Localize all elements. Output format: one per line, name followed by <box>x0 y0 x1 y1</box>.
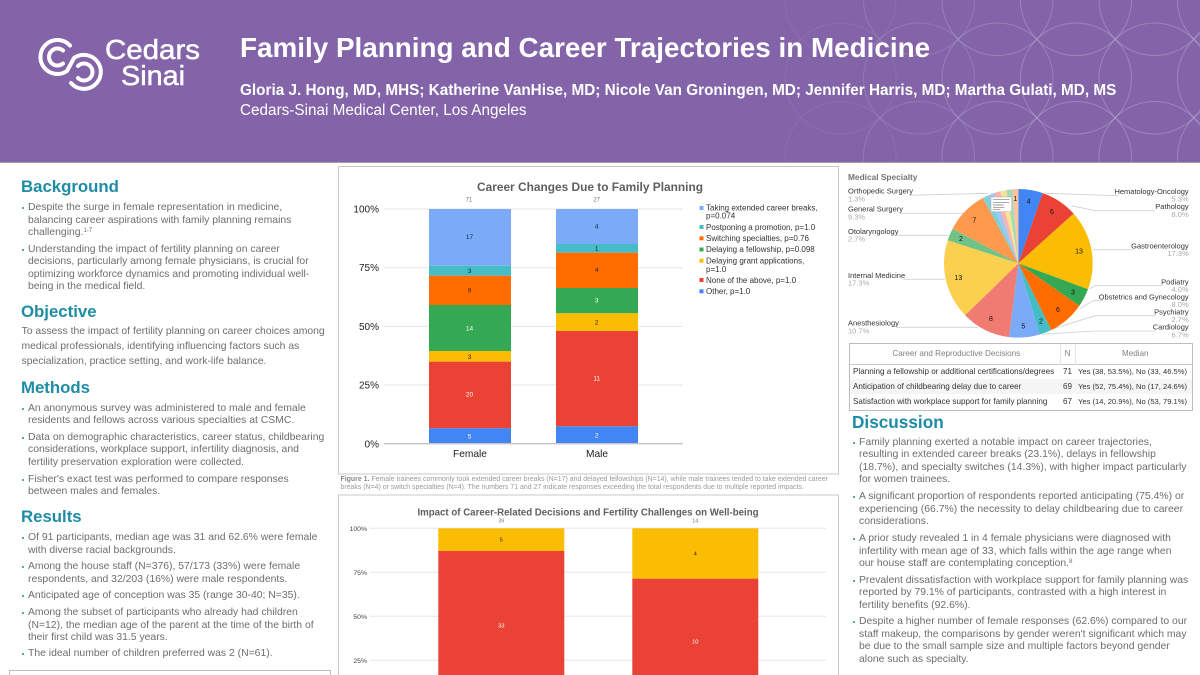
bar: female: 9 <box>468 288 472 295</box>
authors: Gloria J. Hong, MD, MHS; Katherine VanHise, MD; Nicole Van Groningen, MD; Jennifer Harris, MD; Martha Gulati, MD, MS <box>240 82 1116 99</box>
table header row <box>850 349 1192 406</box>
discussion bullet 1: for women trainees. <box>859 474 950 485</box>
discussion bullet 3: our house staff are contemplating conception.8 <box>859 558 1072 569</box>
background bullet 1: Despite the surge in female representation in medicine, <box>28 202 282 213</box>
right pie labels <box>1099 187 1189 340</box>
left pie labels: General Surgery <box>848 205 903 214</box>
right pie labels: Hematology-Oncology <box>1114 187 1189 196</box>
background bullet 2: being in the medical field. <box>28 281 145 292</box>
right pie labels: 2.7% <box>1172 315 1189 324</box>
y axis labels: 0% <box>365 439 379 450</box>
chart legend: Postponing a promotion, p=1.0 <box>706 223 816 232</box>
y axis labels: 100% <box>350 526 367 533</box>
right pie labels: 8.0% <box>1172 300 1189 309</box>
table header row: N <box>1065 349 1070 358</box>
heading: Background: Background <box>21 177 119 196</box>
y axis labels: 75% <box>359 263 379 274</box>
bar: female: 3 <box>468 354 472 361</box>
right pie labels: Podiatry <box>1161 277 1189 286</box>
right pie labels: Cardiology <box>1153 323 1189 332</box>
bar: female <box>438 528 564 675</box>
discussion bullet 2 <box>852 491 1184 529</box>
results bullet 1: Of 91 participants, median age was 31 and 62.6% were female <box>28 532 317 543</box>
background bullet 2 <box>22 244 309 294</box>
background bullet 1: challenging.1-7 <box>28 227 92 238</box>
table row: fellowship: 71 <box>1063 367 1072 376</box>
slice counts: 2 <box>959 236 963 243</box>
totals above bars: 27 <box>593 198 601 204</box>
bar: male: 1 <box>595 246 599 252</box>
y axis labels: 25% <box>359 380 379 392</box>
results bullet 3: Anticipated age of conception was 35 (range 30-40; N=35). <box>28 590 300 601</box>
title: Family Planning and Career Trajectories in Medicine <box>240 32 930 63</box>
results bullet 4: (N=12), the median age of the parent at the time of the birth of <box>28 620 314 631</box>
methods bullet 1 <box>22 403 306 428</box>
x axis labels: Male <box>586 449 608 460</box>
methods bullet 3 <box>22 474 289 499</box>
totals above bars <box>498 518 698 524</box>
methods bullet 1: An anonymous survey was administered to male and female <box>28 403 306 414</box>
slice counts: 5 <box>1021 324 1025 331</box>
slice counts <box>954 196 1083 331</box>
bar: male: 10 <box>692 640 699 646</box>
x axis labels: Female <box>453 449 487 460</box>
bar: male: 4 <box>595 224 599 230</box>
bar: female <box>429 209 511 444</box>
tiny pie legend box <box>991 197 1012 212</box>
totals above bars: 71 <box>466 198 473 204</box>
right pie labels: 5.3% <box>1172 195 1189 204</box>
table header row: Median <box>1122 349 1149 358</box>
logo: Cedars-Sinai: Cedars <box>105 34 200 65</box>
discussion bullet 4: fertility benefits (92.6%). <box>859 600 970 611</box>
heading: Objective: Objective <box>21 302 97 321</box>
discussion bullet 3 <box>852 533 1171 571</box>
slice counts: 6 <box>1050 209 1054 216</box>
panel: medical specialty pie chart <box>848 172 1189 340</box>
left pie labels: 9.3% <box>848 212 865 221</box>
bar: male: 4 <box>694 552 698 558</box>
slice counts: 6 <box>1056 307 1060 314</box>
left pie labels: 1.3% <box>848 195 865 204</box>
chart legend: Taking extended career breaks, <box>706 204 818 213</box>
affiliation: Cedars-Sinai Medical Center, Los Angeles <box>240 102 527 119</box>
results bullet 4 <box>22 607 314 645</box>
logo: Cedars-Sinai <box>38 34 200 91</box>
table row: workplace support <box>853 397 1187 406</box>
results bullet 2: Among the house staff (N=376), 57/173 (33%) were female <box>28 561 300 572</box>
background bullet 2: decisions, particularly among female physicians, is crucial for <box>28 256 309 267</box>
methods bullet 3: Fisher's exact test was performed to compare responses <box>28 474 289 485</box>
results bullet 1: with diverse racial backgrounds. <box>28 545 176 556</box>
background bullet 1: balancing career aspirations with family planning remains <box>28 215 291 226</box>
background bullet 2: Understanding the impact of fertility planning on career <box>28 244 280 255</box>
discussion bullet 3: A prior study revealed 1 in 4 female physicians were diagnosed with <box>859 533 1171 544</box>
table row: fellowship: Planning a fellowship or additional certifications/degrees <box>853 367 1054 376</box>
figure 1 caption: Figure 1. Female trainees commonly took extended career breaks (N=17) and delayed fellowships (N=14), while male trainees tended to take extended career <box>340 476 828 483</box>
slice counts: 1 <box>1013 196 1017 203</box>
results bullet 2: respondents, and 32/203 (16%) were male respondents. <box>28 574 287 585</box>
left pie labels: 10.7% <box>848 326 870 335</box>
totals above bars: 14 <box>692 518 698 524</box>
results bullet 1 <box>22 532 317 557</box>
right pie labels: Psychiatry <box>1154 307 1189 316</box>
chart legend: p=1.0 <box>706 265 727 274</box>
chart legend: Switching specialties, p=0.76 <box>706 234 810 243</box>
y axis labels: 100% <box>353 204 379 216</box>
bar: female: 5 <box>468 434 472 440</box>
table row: childbearing delay: Anticipation of childbearing delay due to career <box>853 382 1021 390</box>
bar: female: 14 <box>466 326 473 332</box>
table header row: Career and Reproductive Decisions <box>892 349 1020 358</box>
pie slices <box>981 226 1056 300</box>
figure 1 caption: breaks (N=4) or switch specialties (N=4). The numbers 71 and 27 indicate responses exceeding the total respondents due to multiple reported impacts. <box>340 484 804 491</box>
slice counts: 13 <box>954 275 962 282</box>
discussion bullet 2: A significant proportion of respondents reported anticipating (75.4%) or <box>859 491 1184 502</box>
right pie labels: Gastroenterology <box>1131 241 1189 250</box>
table row: workplace support: 67 <box>1063 397 1072 406</box>
objective text: To assess the impact of fertility planning on career choices among <box>22 326 325 336</box>
table row: fellowship: Yes (38, 53.5%), No (33, 46.5%) <box>1078 367 1187 376</box>
slice counts: 7 <box>972 217 976 224</box>
methods bullet 2 <box>22 432 324 469</box>
right pie labels: Pathology <box>1155 202 1189 211</box>
table row: childbearing delay <box>850 379 1192 394</box>
methods bullet 3: between males and females. <box>28 486 160 497</box>
chart title: Career Changes Due to Family Planning <box>477 180 703 194</box>
bar: male: 3 <box>595 298 599 304</box>
y axis labels: 75% <box>353 570 367 577</box>
discussion bullet 5: staff makeup, the comparisons by gender weren't significant which may <box>859 629 1187 640</box>
bar: female: 20 <box>466 392 473 398</box>
y axis labels: 50% <box>359 322 379 333</box>
bar: male: 4 <box>595 267 599 274</box>
bar: female: 5 <box>500 538 503 544</box>
table row: childbearing delay: Yes (52, 75.4%), No (17, 24.6%) <box>1078 382 1187 390</box>
slice counts: 2 <box>1039 318 1043 325</box>
discussion bullet 5: Despite a higher number of female responses (62.6%) compared to our <box>859 616 1187 627</box>
header banner <box>0 0 1200 163</box>
discussion bullet 5: alone such as specialty. <box>859 654 969 665</box>
chart legend: p=0.074 <box>706 212 736 220</box>
bar: male <box>632 528 758 675</box>
discussion bullet 2: experiencing (66.7%) the necessity to delay childbearing due to career <box>859 504 1183 515</box>
left pie labels: 17.3% <box>848 279 870 288</box>
bar: female: 3 <box>468 268 472 275</box>
left pie labels: 2.7% <box>848 235 865 244</box>
table row: childbearing delay: 69 <box>1063 382 1072 390</box>
y axis labels: 50% <box>353 614 367 621</box>
methods bullet 2: Data on demographic characteristics, career status, childbearing <box>28 432 324 443</box>
bottom-left cut-off panel <box>9 670 331 675</box>
header circle pattern <box>784 0 1200 162</box>
bar: male: 2 <box>595 320 599 326</box>
discussion bullet 3: infertility with mean age of 33, which falls within the age range when <box>859 546 1171 557</box>
totals above bars <box>466 198 601 204</box>
bar: female: 17 <box>466 234 473 241</box>
results bullet 4: Among the subset of participants who already had children <box>28 607 298 618</box>
bar: male: 2 <box>595 432 599 440</box>
methods bullet 1: residents and fellows across various specialties at CSMC. <box>28 415 294 426</box>
pie title: Medical Specialty <box>848 172 918 182</box>
table row: workplace support: Yes (14, 20.9%), No (53, 79.1%) <box>1078 397 1187 406</box>
methods bullet 2: fertility preservation exploration were collected. <box>28 457 244 468</box>
heading: Discussion: Discussion <box>852 412 944 432</box>
discussion bullet 2: considerations. <box>859 516 929 527</box>
heading: Results: Results <box>21 507 82 526</box>
chart title: Impact of Career-Related Decisions and Fertility Challenges on Well-being <box>417 507 759 518</box>
y axis labels <box>350 526 367 665</box>
table row: workplace support: Satisfaction with workplace support for family planning <box>853 397 1047 406</box>
heading: Methods: Methods <box>21 378 90 397</box>
y axis labels: 25% <box>353 658 367 665</box>
slice counts: 13 <box>1075 249 1083 256</box>
totals above bars: 39 <box>498 518 504 524</box>
left pie labels: Anesthesiology <box>848 319 899 328</box>
discussion bullet 1: resulting in extended career breaks (23.1%), delays in fellowship <box>859 449 1156 460</box>
discussion bullet 4: reported by 79.1% of participants, contrasted with a high interest in <box>859 587 1166 598</box>
objective text: medical professionals, identifying influencing factors such as <box>22 341 299 352</box>
left pie labels: Internal Medicine <box>848 271 905 280</box>
right pie labels: 8.0% <box>1172 210 1189 219</box>
leader lines <box>897 193 1162 334</box>
slice counts: 3 <box>1071 289 1075 296</box>
discussion bullet 4: Prevalent dissatisfaction with workplace support for family planning was <box>859 575 1188 586</box>
left pie labels: Otolaryngology <box>848 227 899 236</box>
chart legend: None of the above, p=1.0 <box>706 276 797 285</box>
left pie labels: Orthopedic Surgery <box>848 187 913 196</box>
chart legend: Delaying a fellowship, p=0.098 <box>706 245 815 254</box>
discussion bullet 1: Family planning exerted a notable impact on career trajectories, <box>859 437 1152 448</box>
chart legend <box>700 204 818 296</box>
right pie labels: 17.3% <box>1167 249 1189 258</box>
objective text <box>22 326 325 367</box>
x axis labels <box>453 449 608 460</box>
discussion bullet 4 <box>852 575 1188 612</box>
left pie labels <box>848 187 913 335</box>
chart legend: Delaying grant applications, <box>706 256 804 266</box>
background bullet 2: optimizing workforce dynamics and promoting individual well- <box>28 269 309 280</box>
results bullet 4: their first child was 31.5 years. <box>28 632 168 643</box>
background bullet 1 <box>22 202 291 240</box>
chart legend: Other, p=1.0 <box>706 287 751 296</box>
discussion bullet 1 <box>852 437 1186 487</box>
discussion bullet 1: (18.7%), and specialty switches (14.3%), with higher impact particularly <box>859 462 1186 473</box>
table row: fellowship <box>853 367 1187 376</box>
right pie labels: 6.7% <box>1172 331 1189 340</box>
figure 1 caption <box>340 476 828 491</box>
bar: male: 11 <box>593 376 600 382</box>
right pie labels: 4.0% <box>1172 285 1189 294</box>
results bullet 5: The ideal number of children preferred was 2 (N=61). <box>28 648 273 659</box>
objective text: specialization, practice setting, and work-life balance. <box>22 356 266 367</box>
methods bullet 2: considerations, workplace support, infertility diagnosis, and <box>28 444 299 455</box>
slice counts: 8 <box>989 316 993 323</box>
slice counts: 4 <box>1027 198 1031 205</box>
right pie labels: Obstetrics and Gynecology <box>1099 292 1189 301</box>
results bullet 2 <box>22 561 300 586</box>
bar: male <box>556 209 638 444</box>
logo: Cedars-Sinai: Sinai <box>121 60 185 91</box>
discussion bullet 5 <box>852 616 1187 666</box>
y axis labels <box>353 204 379 450</box>
discussion bullet 5: be due to the small sample size and multiple factors beyond gender <box>859 641 1170 652</box>
bar: female: 33 <box>498 624 505 630</box>
table: career and reproductive decisions <box>849 343 1193 411</box>
